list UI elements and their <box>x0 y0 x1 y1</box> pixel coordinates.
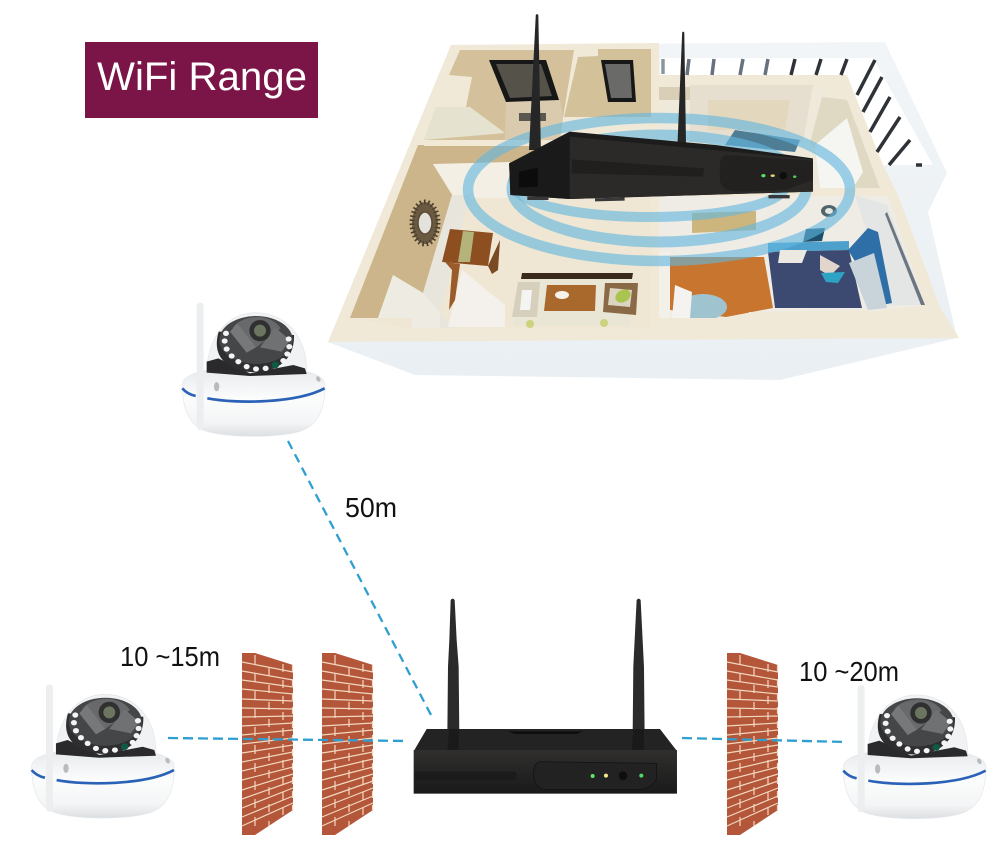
dashed link: left camera to NVR <box>168 738 406 741</box>
bathroom left <box>424 50 574 140</box>
NVR recorder bottom <box>414 599 677 794</box>
WiFi signal rings <box>468 118 850 261</box>
icon: dome camera left <box>32 684 174 818</box>
antenna rear <box>678 32 686 143</box>
floor plan with NVR and signal rings <box>328 14 959 380</box>
sofa set with coffee table <box>512 273 638 328</box>
mirror <box>412 202 438 244</box>
brick wall 3 <box>727 653 778 835</box>
upper bedroom <box>655 85 880 195</box>
antenna right <box>633 599 645 737</box>
dashed link: NVR to right camera <box>682 738 846 742</box>
bathroom right <box>564 49 651 117</box>
dashed link: dome camera to NVR (50m) <box>288 441 431 715</box>
brick wall 1 <box>242 653 293 835</box>
brick wall 2 <box>322 653 373 835</box>
antenna left <box>447 599 459 737</box>
panel: WiFi Range title: WiFi Range <box>97 55 307 99</box>
icon: dome camera top <box>182 303 325 436</box>
dining table <box>442 229 500 310</box>
living room floor and walls <box>350 145 652 328</box>
NVR recorder in house <box>509 14 813 201</box>
icon: dome camera right <box>843 685 986 819</box>
label: 10 ~20m: 10 ~20m <box>799 656 899 687</box>
antenna front <box>529 14 541 150</box>
label: 10 ~15m: 10 ~15m <box>120 641 220 672</box>
panel: WiFi Range title <box>85 42 318 118</box>
label: 50m: 50m <box>345 492 397 523</box>
building outer shell <box>328 42 957 380</box>
lower rooms <box>655 193 925 328</box>
room dividers <box>424 43 887 335</box>
cream wall tops <box>328 43 959 342</box>
balcony with railing <box>660 58 933 165</box>
